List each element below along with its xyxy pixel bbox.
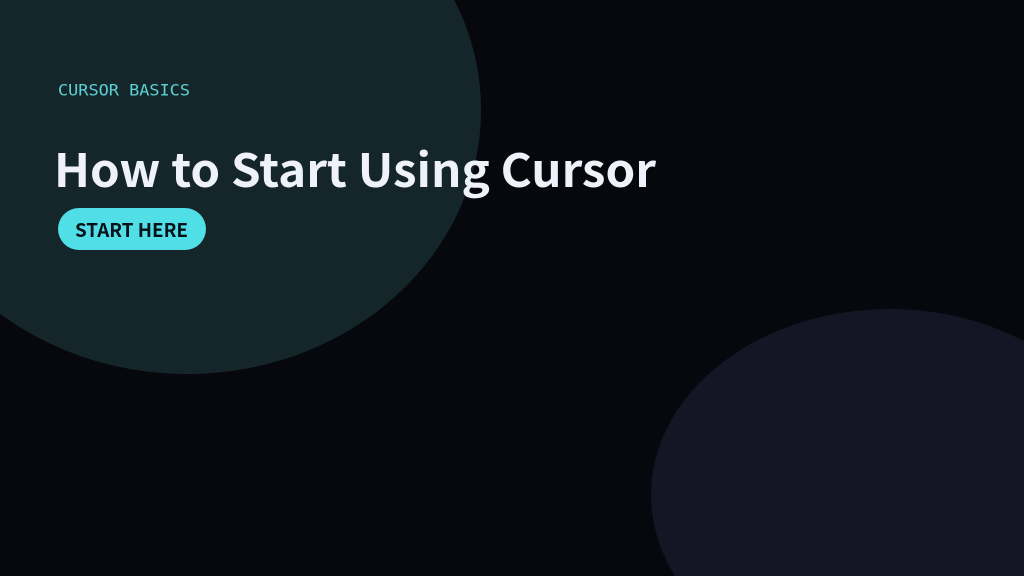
purple background ellipse — [651, 309, 1024, 576]
start here badge: START HERE — [75, 216, 188, 243]
title: How to Start Using Cursor — [54, 135, 657, 201]
eyebrow label: CURSOR BASICS — [58, 80, 190, 100]
teal background ellipse — [0, 0, 481, 374]
start here badge — [58, 208, 206, 250]
